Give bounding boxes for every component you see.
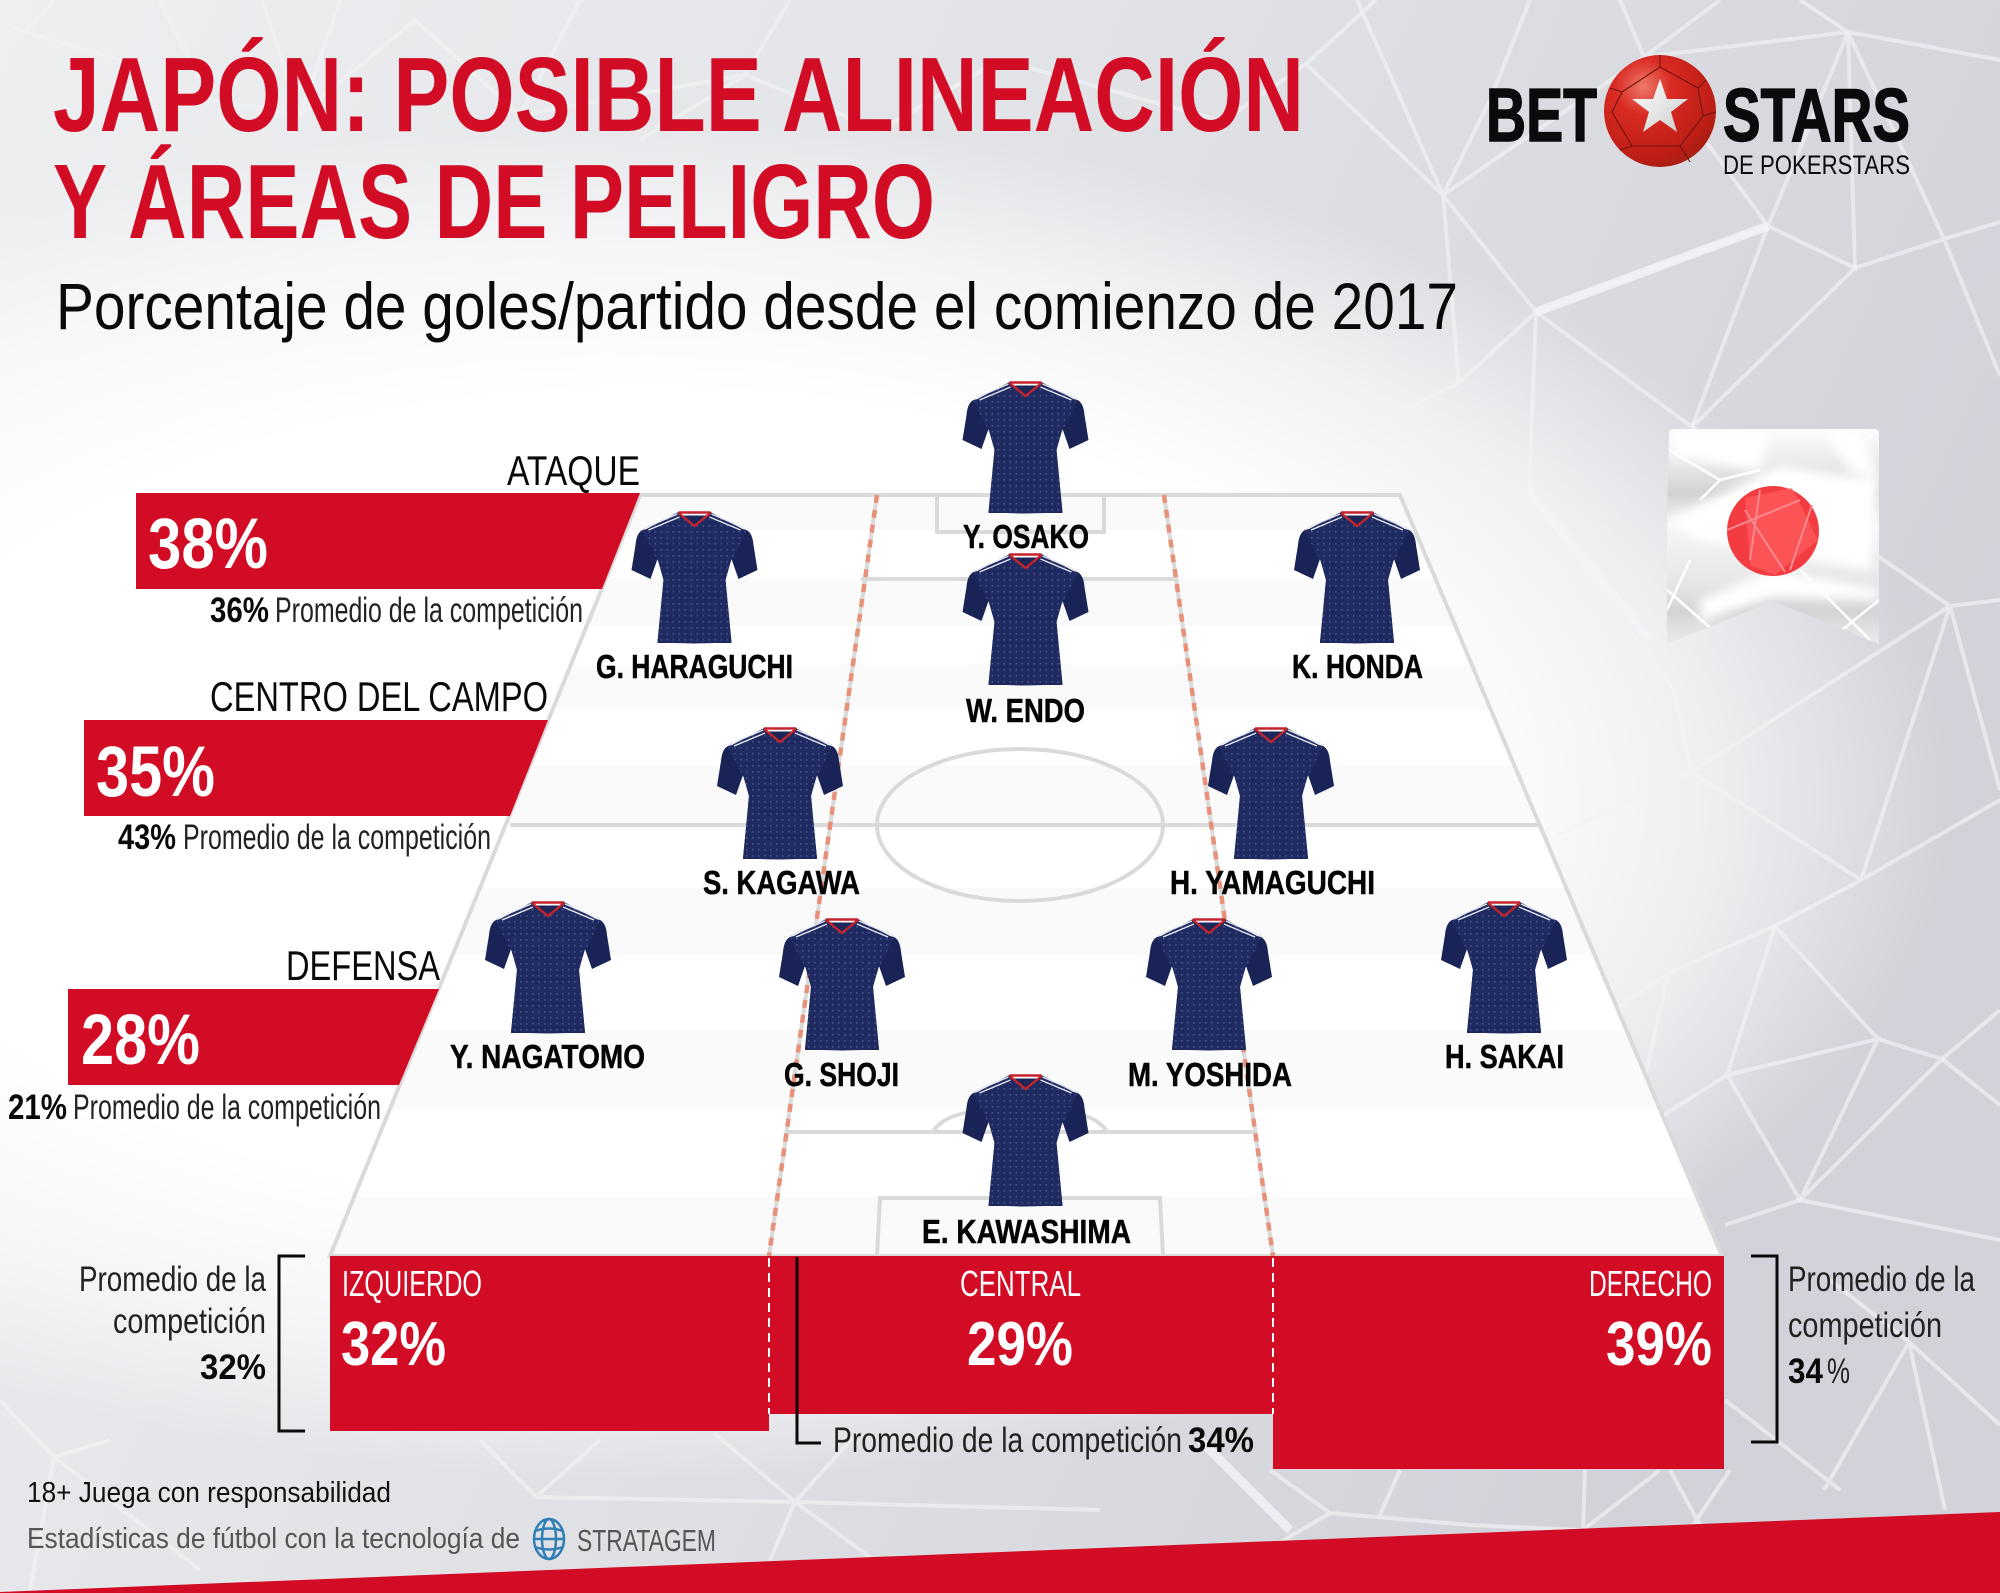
player: H. Sakai xyxy=(1441,902,1567,1075)
icon: Stratagem globe xyxy=(534,1519,564,1559)
logo: BetStars de PokerStars: STARS xyxy=(1723,73,1910,157)
player: K. Honda xyxy=(1292,512,1423,685)
bracket and note: central competition average xyxy=(797,1257,1254,1460)
bar: derecho 39%: 39% xyxy=(1606,1310,1712,1379)
player: H. Sakai: H. SAKAI xyxy=(1445,1038,1564,1075)
bar: izquierdo 32%: IZQUIERDO xyxy=(342,1263,482,1304)
logo: BetStars de PokerStars: BET xyxy=(1486,73,1597,157)
responsible gambling note: 18+ Juega con responsabilidad xyxy=(27,1477,391,1509)
bracket and note: right competition average: 34 xyxy=(1788,1352,1823,1391)
player: Y. Osako: Y. OSAKO xyxy=(963,518,1089,555)
player: M. Yoshida: M. YOSHIDA xyxy=(1128,1056,1292,1093)
player: G. Shoji xyxy=(779,919,905,1093)
note: competition average 43%: 43% xyxy=(118,818,176,857)
title: JAPÓN: POSIBLE ALINEACIÓN xyxy=(53,36,1304,154)
icon: red football with star xyxy=(1604,55,1716,167)
title: Y ÁREAS DE PELIGRO xyxy=(53,143,935,261)
player: Y. Nagatomo xyxy=(450,902,645,1075)
note: competition average 21%: 21% xyxy=(8,1088,67,1127)
bar: ataque 38% xyxy=(136,493,640,589)
bar: central 29%: CENTRAL xyxy=(960,1263,1081,1304)
football pitch xyxy=(300,495,1750,1256)
player: S. Kagawa xyxy=(703,728,860,901)
logo: BetStars de PokerStars: DE POKERSTARS xyxy=(1723,150,1910,180)
player: S. Kagawa: S. KAGAWA xyxy=(703,864,860,901)
note: competition average 21%: Promedio de la competición xyxy=(73,1088,381,1127)
player: W. Endo: W. ENDO xyxy=(966,692,1085,729)
stats credit with Stratagem logo: Estadísticas de fútbol con la tecnología de xyxy=(27,1523,520,1555)
bar: ataque 38%: 38% xyxy=(148,505,268,584)
bar: centro del campo 35%: 35% xyxy=(96,733,215,812)
note: competition average 36%: 36% xyxy=(210,591,269,630)
note: competition average 36%: Promedio de la competición xyxy=(275,591,583,630)
note: competition average 43%: Promedio de la competición xyxy=(183,818,491,857)
bracket and note: central competition average: Promedio de la competición xyxy=(833,1421,1182,1460)
bar: defensa 28%: 28% xyxy=(81,1001,200,1080)
bar: izquierdo 32%: 32% xyxy=(341,1310,446,1379)
bracket and note: right competition average: % xyxy=(1827,1352,1850,1391)
red bottom wedge xyxy=(0,1512,2000,1593)
logo: BetStars de PokerStars xyxy=(1486,55,1910,180)
bar: centro del campo 35% xyxy=(84,720,548,816)
player: M. Yoshida xyxy=(1128,919,1292,1093)
bracket and note: left competition average: Promedio de la xyxy=(79,1260,266,1299)
player: H. Yamaguchi xyxy=(1170,728,1375,901)
bar: derecho 39% xyxy=(1273,1256,1724,1469)
bar: defensa 28% xyxy=(68,989,439,1085)
stat panel: centro del campo xyxy=(84,673,548,857)
subtitle: Porcentaje de goles/partido desde el comienzo de 2017 xyxy=(56,269,1458,343)
title xyxy=(53,36,1304,261)
bracket and note: left competition average xyxy=(79,1256,305,1431)
bar: central 29% xyxy=(769,1256,1273,1414)
player: G. Haraguchi xyxy=(596,512,793,685)
label: centro del campo: CENTRO DEL CAMPO xyxy=(210,673,548,720)
bar: izquierdo 32% xyxy=(330,1256,769,1431)
bar: central 29%: 29% xyxy=(967,1310,1073,1379)
player: E. Kawashima: E. KAWASHIMA xyxy=(922,1213,1131,1250)
player: W. Endo xyxy=(962,554,1088,729)
player: E. Kawashima xyxy=(922,1075,1131,1250)
player: H. Yamaguchi: H. YAMAGUCHI xyxy=(1170,864,1375,901)
player: G. Shoji: G. SHOJI xyxy=(784,1056,899,1093)
note: competition average 21% xyxy=(8,1088,381,1127)
player: K. Honda: K. HONDA xyxy=(1292,648,1423,685)
bracket and note: central competition average: 34% xyxy=(1188,1421,1254,1460)
bracket and note: right competition average: competición xyxy=(1788,1306,1942,1345)
stats credit with Stratagem logo xyxy=(27,1519,716,1559)
stats credit with Stratagem logo: STRATAGEM xyxy=(577,1523,716,1558)
bar: derecho 39%: DERECHO xyxy=(1589,1263,1712,1304)
note: competition average 36% xyxy=(210,591,583,630)
player: Y. Nagatomo: Y. NAGATOMO xyxy=(450,1038,645,1075)
player: Y. Osako xyxy=(962,382,1089,555)
icon: Japanese flag banner xyxy=(1667,429,1879,644)
player: G. Haraguchi: G. HARAGUCHI xyxy=(596,648,793,685)
stat panel: ataque xyxy=(136,447,640,630)
stat panel: defensa xyxy=(8,942,440,1127)
note: competition average 43% xyxy=(118,818,491,857)
bracket and note: left competition average: competición xyxy=(113,1302,266,1341)
bracket and note: left competition average: 32% xyxy=(200,1348,266,1387)
label: defensa: DEFENSA xyxy=(286,942,440,989)
bracket and note: right competition average xyxy=(1751,1256,1975,1442)
label: ataque: ATAQUE xyxy=(507,447,640,494)
